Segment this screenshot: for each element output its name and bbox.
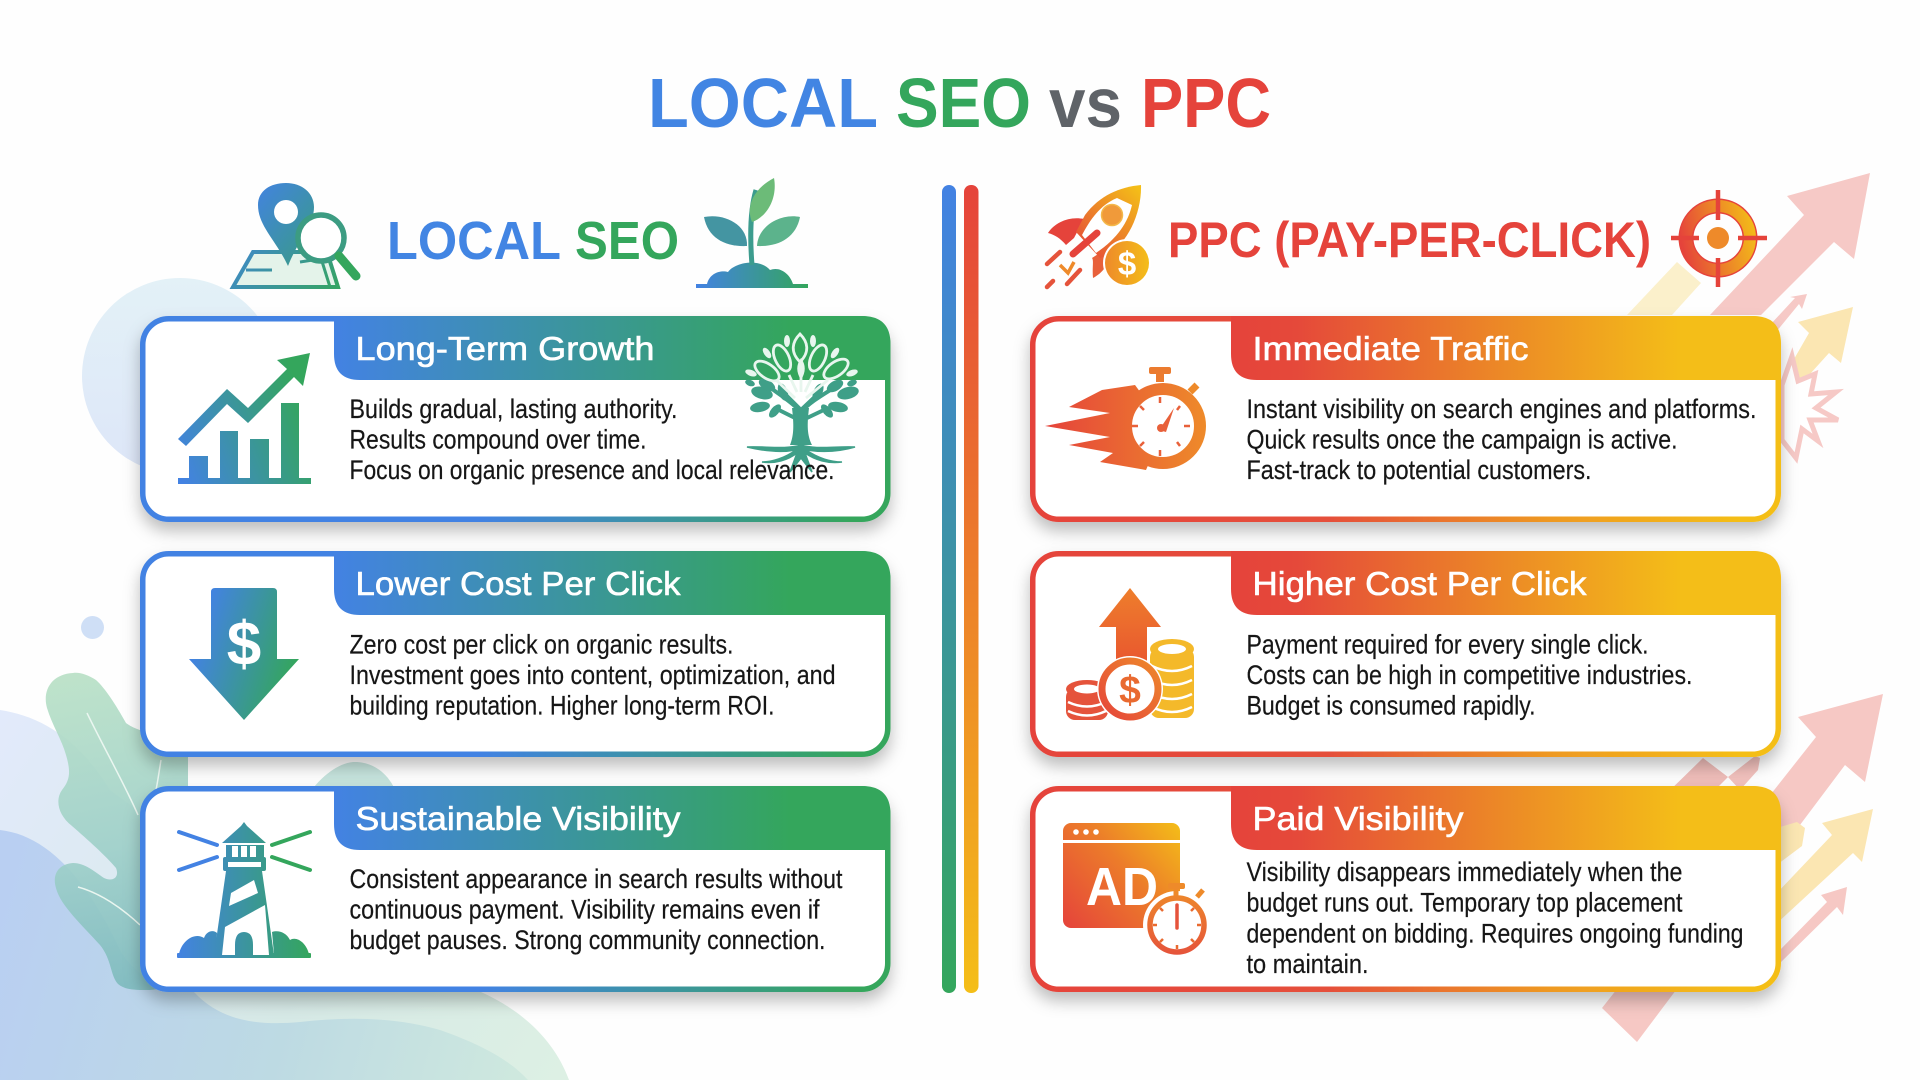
panel body: Investment goes into content, optimization, and	[350, 660, 836, 690]
panel header	[1231, 786, 1781, 850]
panel body: Budget is consumed rapidly.	[1246, 690, 1536, 720]
panel body: Payment required for every single click.	[1246, 630, 1648, 660]
panel: Lower Cost Per Click	[143, 551, 890, 754]
panel: Paid Visibility	[1033, 786, 1781, 989]
panel body: Quick results once the campaign is active.	[1246, 424, 1678, 454]
icon: rising cost coins	[1066, 588, 1194, 722]
panel body: to maintain.	[1246, 949, 1368, 979]
panel: Higher Cost Per Click	[1033, 551, 1781, 754]
panel body	[1246, 630, 1692, 720]
panel header	[334, 316, 890, 380]
icon: rising cost coins: $	[1119, 669, 1141, 712]
icon: map pin with magnifier	[233, 183, 356, 287]
panel header	[334, 551, 890, 615]
panel body	[1246, 394, 1756, 485]
icon: sprouting plant	[696, 178, 808, 288]
panel body: Costs can be high in competitive industries.	[1246, 660, 1692, 690]
panel body: dependent on bidding. Requires ongoing funding	[1246, 918, 1744, 948]
heading: Local SEO column: SEO	[575, 211, 679, 271]
heading: Local SEO column	[387, 211, 679, 271]
panel body: continuous payment. Visibility remains even if	[350, 894, 820, 924]
background: right decorative arrows	[1602, 173, 1883, 1042]
icon: ad window with stopwatch: AD	[1086, 857, 1158, 917]
panel header	[1231, 316, 1781, 380]
heading: Local SEO column: LOCAL	[387, 211, 561, 271]
icon: lighthouse	[177, 822, 311, 958]
panel body: Visibility disappears immediately when the	[1246, 857, 1682, 887]
panel body: budget pauses. Strong community connection.	[350, 925, 826, 955]
panel body: building reputation. Higher long-term ROI.	[350, 690, 774, 720]
panel body: Fast-track to potential customers.	[1246, 455, 1592, 485]
panel header	[334, 786, 890, 850]
panel title: Long-Term Growth	[356, 330, 654, 367]
icon: speeding stopwatch	[1045, 367, 1200, 470]
panel body: Instant visibility on search engines and platforms.	[1246, 394, 1756, 424]
panel body: Zero cost per click on organic results.	[350, 630, 734, 660]
center divider bars	[942, 185, 978, 993]
background: left decorative shapes	[0, 278, 569, 1080]
panel: Long-Term Growth	[143, 316, 890, 519]
panel title: Lower Cost Per Click	[356, 565, 681, 602]
panel body	[350, 394, 834, 485]
icon: crosshair target	[1671, 190, 1767, 287]
title: SEO	[896, 64, 1031, 142]
icon: ad window with stopwatch	[1063, 823, 1211, 959]
panel title: Immediate Traffic	[1252, 330, 1528, 367]
panel body	[1246, 857, 1744, 979]
panel body: Focus on organic presence and local relevance.	[350, 455, 834, 485]
panel body: Results compound over time.	[350, 424, 646, 454]
title: LOCAL	[648, 64, 878, 142]
icon: down arrow with dollar	[189, 588, 299, 720]
icon: growth chart	[178, 353, 311, 484]
panel body: Builds gradual, lasting authority.	[350, 394, 678, 424]
panel body: Consistent appearance in search results without	[350, 864, 843, 894]
panel body: budget runs out. Temporary top placement	[1246, 888, 1683, 918]
panel title: Paid Visibility	[1252, 800, 1464, 837]
title	[648, 64, 1271, 142]
icon: rocket with dollar coin: $	[1118, 245, 1136, 282]
icon: growth tree	[744, 334, 860, 472]
title: PPC	[1141, 64, 1271, 142]
icon: rocket with dollar coin	[1047, 185, 1151, 287]
panel: Immediate Traffic	[1033, 316, 1781, 519]
icon: down arrow with dollar: $	[227, 610, 261, 679]
title: vs	[1049, 64, 1122, 142]
panel: Sustainable Visibility	[143, 786, 890, 989]
panel body	[350, 630, 836, 720]
panel header	[1231, 551, 1781, 615]
panel title: Higher Cost Per Click	[1252, 565, 1587, 602]
panel body	[350, 864, 843, 955]
panel title: Sustainable Visibility	[356, 800, 681, 837]
heading: PPC column: PPC (PAY-PER-CLICK)	[1168, 212, 1651, 268]
